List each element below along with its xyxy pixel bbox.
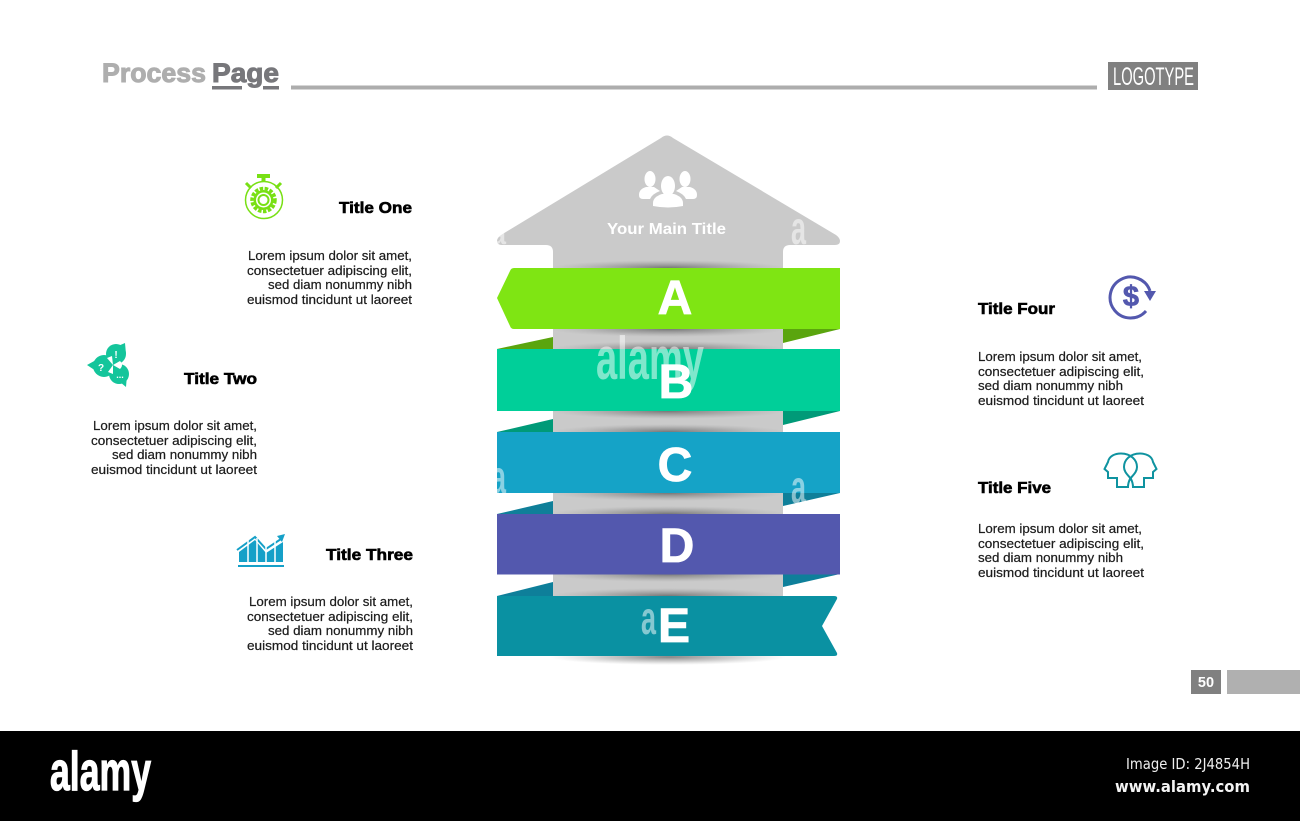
ribbon D xyxy=(497,514,840,574)
text block: sed diam nonummy nibh xyxy=(978,378,1123,393)
ribbon A: A xyxy=(658,272,692,325)
text block: sed diam nonummy nibh xyxy=(112,447,257,462)
ribbon C: C xyxy=(658,439,692,492)
footer logo: alamy xyxy=(50,740,151,802)
ribbon folds xyxy=(497,329,840,596)
icon: speech bubbles: ... xyxy=(116,370,124,380)
header title: Page xyxy=(212,58,279,88)
watermark letters: a xyxy=(491,451,506,503)
ribbon C xyxy=(497,432,840,493)
text block: Lorem ipsum dolor sit amet, xyxy=(93,418,257,433)
bottom shadow xyxy=(550,649,786,665)
text block: Lorem ipsum dolor sit amet, xyxy=(248,248,412,263)
main title: Your Main Title xyxy=(607,221,726,238)
ribbon B: B xyxy=(659,356,693,409)
heading: Title Four xyxy=(978,301,1055,318)
text block: Lorem ipsum dolor sit amet, xyxy=(978,521,1142,536)
icon: stopwatch gear xyxy=(246,174,282,218)
logotype badge: LOGOTYPE xyxy=(1113,63,1194,91)
watermark letters: a xyxy=(641,592,656,644)
text block xyxy=(978,521,1144,580)
icon: speech bubbles: ? xyxy=(98,363,104,374)
ribbon D: D xyxy=(660,520,694,573)
panel: title four xyxy=(978,277,1156,408)
panel: title two xyxy=(87,343,257,477)
heading: Title Two xyxy=(184,371,257,388)
text block xyxy=(91,418,257,477)
icon: dollar cycle xyxy=(1110,277,1156,318)
watermark letters: a xyxy=(791,461,806,513)
ribbon E: E xyxy=(658,600,690,653)
arrow body xyxy=(497,136,840,600)
header rule xyxy=(291,86,1097,90)
page number xyxy=(1191,670,1221,694)
watermark letters: a xyxy=(791,202,806,254)
icon: dollar cycle: $ xyxy=(1123,281,1139,313)
text block: consectetuer adipiscing elit, xyxy=(978,364,1144,379)
site url: www.alamy.com xyxy=(1115,777,1250,796)
text block xyxy=(247,594,413,653)
heading: Title Three xyxy=(326,547,413,564)
image id: Image ID: 2J4854H xyxy=(1126,755,1250,773)
logotype badge xyxy=(1108,62,1198,91)
footer band xyxy=(0,731,1300,821)
heading: Title One xyxy=(339,200,412,217)
text block: Lorem ipsum dolor sit amet, xyxy=(978,349,1142,364)
text block: sed diam nonummy nibh xyxy=(978,550,1123,565)
ribbon B xyxy=(497,349,840,411)
icon: speech bubbles: ! xyxy=(114,350,118,361)
watermark letters: alamy xyxy=(596,325,704,392)
text block: sed diam nonummy nibh xyxy=(268,277,412,292)
text block xyxy=(247,248,412,307)
text block: euismod tincidunt ut laoreet xyxy=(91,462,257,477)
text block: euismod tincidunt ut laoreet xyxy=(978,393,1144,408)
ribbon A xyxy=(497,268,840,329)
text block: euismod tincidunt ut laoreet xyxy=(978,565,1144,580)
text block: consectetuer adipiscing elit, xyxy=(247,263,412,278)
watermark letters xyxy=(491,202,806,644)
central arrow diagram xyxy=(497,136,840,665)
watermark letters: a xyxy=(491,218,506,251)
ribbon shadows xyxy=(570,262,766,596)
panel: title five xyxy=(978,454,1156,580)
text block: consectetuer adipiscing elit, xyxy=(91,433,257,448)
icon: two heads xyxy=(1104,454,1156,487)
icon: people xyxy=(639,171,697,208)
text block: Lorem ipsum dolor sit amet, xyxy=(249,594,413,609)
panel: title three xyxy=(237,534,413,653)
header title xyxy=(102,58,279,90)
icon: growth chart xyxy=(237,534,285,567)
text block: euismod tincidunt ut laoreet xyxy=(247,638,413,653)
text block: consectetuer adipiscing elit, xyxy=(978,536,1144,551)
page number: 50 xyxy=(1198,675,1214,691)
text block xyxy=(978,349,1144,408)
heading: Title Five xyxy=(978,480,1051,497)
icon: speech bubbles xyxy=(87,343,129,387)
text block: euismod tincidunt ut laoreet xyxy=(247,292,412,307)
panel: title one xyxy=(246,174,412,307)
ribbon E xyxy=(497,596,837,656)
header title: Process xyxy=(102,58,206,88)
text block: consectetuer adipiscing elit, xyxy=(247,609,413,624)
text block: sed diam nonummy nibh xyxy=(268,623,413,638)
page number bar xyxy=(1227,670,1300,694)
